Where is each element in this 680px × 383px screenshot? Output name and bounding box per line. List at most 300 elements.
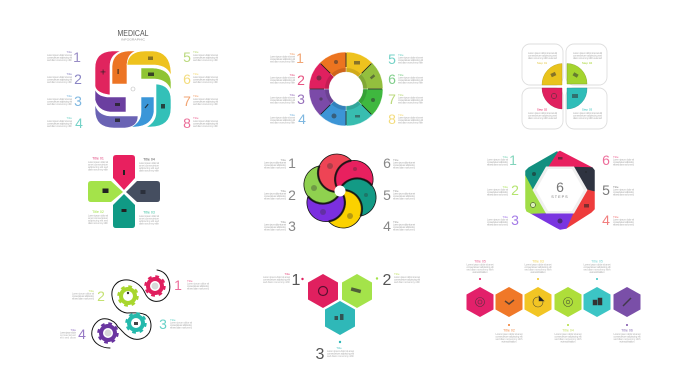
left text blocks: Title — [66, 94, 72, 98]
left numbers and text: Lorem ipsum dolor sit amet — [270, 76, 295, 80]
cross titles and text: Title 01 — [92, 156, 104, 160]
left numbers and text: consectetuer adipiscing elit — [270, 98, 295, 102]
gear numbers and text: Lorem ipsum dolor — [60, 330, 76, 334]
cross titles and text: adipiscing elit sed — [139, 166, 160, 170]
right text blocks: Title — [193, 50, 199, 54]
step text: Step 01 — [537, 61, 548, 65]
gears — [98, 276, 164, 342]
bottom titles and text — [496, 328, 641, 344]
bottom titles and text: euismod tincidunt — [502, 340, 517, 344]
right text blocks: sed diam nonummy nibh — [193, 124, 219, 128]
right numbers and text: Title — [613, 185, 619, 189]
numbers and text: Title — [394, 272, 400, 276]
top titles and text: euismod tincidunt — [590, 270, 605, 274]
right numbers and text: elit sed diam nonummy — [393, 166, 416, 170]
right numbers and text: Title — [393, 158, 399, 162]
left numbers and text: Title — [502, 215, 508, 219]
left numbers and text: Lorem ipsum dolor sit amet — [270, 96, 295, 100]
right numbers and text: Title — [398, 53, 404, 57]
right numbers and text — [383, 155, 416, 234]
right numbers and text: Lorem ipsum dolor sit amet — [393, 192, 415, 196]
left text blocks: consectetuer adipiscing elit — [47, 122, 72, 126]
left numbers and text: sed diam nonummy nibh — [270, 100, 296, 104]
left numbers and text: consectetuer adipiscing — [264, 194, 287, 198]
left text blocks: consectetuer adipiscing elit — [47, 56, 72, 60]
step text: consectetuer adipiscing sed — [573, 54, 603, 58]
panel: four arrow cross — [88, 155, 160, 228]
cross titles and text: adipiscing elit sed — [88, 165, 109, 169]
swirl petals — [297, 153, 383, 229]
left numbers and text: consectetuer adipiscing — [264, 225, 287, 229]
left text blocks: sed diam nonummy nibh — [47, 102, 73, 106]
bottom titles and text: sed diam nonummy nibh — [554, 337, 582, 341]
right numbers and text: Lorem ipsum dolor sit amet — [398, 56, 423, 60]
left numbers and text: consectetuer adipiscing — [487, 220, 509, 224]
panel: six petal swirl — [264, 153, 416, 234]
gear numbers and text: 1 — [174, 277, 182, 293]
inner white hexagon — [536, 169, 584, 211]
left numbers and text: elit sed diam nonummy — [487, 192, 509, 196]
gear numbers and text: Title — [187, 279, 193, 283]
right numbers and text: consectetuer adipiscing — [613, 220, 635, 224]
step text: consectetuer adipiscing sed — [528, 54, 558, 58]
panel: four rounded cards with petals — [522, 44, 607, 129]
numbers and text: sed diam nonummy nibh — [394, 280, 421, 284]
panel: six hexagon timeline — [466, 260, 641, 344]
right numbers and text: elit sed diam nonummy — [613, 162, 635, 166]
right numbers — [183, 49, 191, 131]
title — [118, 29, 149, 42]
right numbers and text — [388, 51, 424, 127]
left text blocks: Title — [66, 50, 72, 54]
left text blocks: consectetuer adipiscing elit — [47, 78, 72, 82]
left numbers and text: sed diam nonummy nibh — [270, 120, 296, 124]
petals — [542, 64, 587, 109]
top titles and text: Lorem ipsum dolor sit amet — [466, 262, 494, 266]
top titles and text: consectetuer adipiscing elit — [466, 265, 494, 269]
left numbers and text: elit sed diam nonummy — [264, 166, 287, 170]
left numbers: 2 — [74, 71, 82, 87]
left numbers and text: consectetuer adipiscing elit — [270, 118, 295, 122]
right numbers and text: 4 — [383, 218, 391, 234]
numbers and text — [263, 272, 421, 363]
step text — [528, 51, 603, 120]
cross titles and text: diam nonummy nibh — [88, 168, 109, 172]
hexagon center label — [551, 179, 569, 199]
left numbers and text — [487, 152, 519, 228]
numbers and text: Title — [336, 346, 342, 350]
left text blocks: sed diam nonummy nibh — [47, 58, 73, 62]
step text: Step 03 — [582, 108, 593, 112]
left numbers and text: 2 — [297, 72, 305, 88]
right numbers and text: 4 — [602, 212, 610, 228]
top titles and text: consectetuer adipiscing elit — [584, 265, 611, 269]
right numbers and text: Lorem ipsum dolor sit — [613, 188, 634, 192]
left text blocks: consectetuer adipiscing elit — [47, 100, 72, 104]
bottom titles and text: Title 06 — [621, 328, 633, 332]
right numbers: 5 — [183, 49, 191, 65]
right numbers and text: consectetuer adipiscing elit — [398, 78, 423, 82]
left numbers and text: 1 — [509, 152, 517, 168]
right numbers: 8 — [183, 115, 191, 131]
step text: Step 04 — [582, 61, 593, 65]
left numbers and text: Title — [502, 185, 508, 189]
right text blocks: consectetuer adipiscing elit — [193, 100, 218, 104]
numbers and text: Lorem ipsum dolor sit amet — [394, 275, 420, 279]
right numbers and text — [602, 152, 635, 228]
left numbers: 1 — [73, 49, 81, 65]
right numbers and text: Title — [613, 215, 619, 219]
left numbers and text: consectetuer adipiscing — [487, 160, 509, 164]
left text blocks: Lorem ipsum dolor sit amet — [47, 75, 72, 79]
right numbers and text: Lorem ipsum dolor sit amet — [393, 222, 415, 226]
right text blocks: Lorem ipsum dolor sit amet — [193, 75, 218, 79]
right numbers and text: sed diam nonummy nibh — [398, 120, 424, 124]
gear numbers and text: consectetuer — [60, 333, 76, 337]
cross titles and text: Lorem ipsum dolor sit — [139, 214, 159, 218]
gear numbers and text: 4 — [78, 326, 86, 342]
cross titles and text: adipiscing elit sed — [88, 218, 109, 222]
left numbers and text: consectetuer adipiscing elit — [270, 57, 295, 61]
title: MEDICAL — [118, 29, 149, 38]
hexagon icons — [318, 286, 361, 320]
top titles and text: euismod tincidunt — [472, 270, 488, 274]
top titles and text: Title 03 — [532, 260, 544, 264]
swirl center — [334, 186, 346, 196]
right text blocks: sed diam nonummy nibh — [193, 80, 219, 84]
bottom titles and text: Lorem ipsum dolor sit amet — [614, 332, 641, 336]
panel: medical square infographic — [47, 29, 219, 131]
step text: Step 02 — [537, 108, 548, 112]
left numbers: 4 — [75, 115, 83, 131]
gear numbers and text: 2 — [97, 288, 105, 304]
numbers and text: sed diam nonummy nibh — [327, 354, 355, 358]
left text blocks: sed diam nonummy nibh — [47, 80, 73, 84]
numbers and text: 2 — [383, 272, 392, 289]
right numbers and text: Title — [393, 189, 399, 193]
left numbers and text — [264, 155, 296, 234]
step text: Lorem ipsum dolor sit amet elit — [528, 51, 557, 55]
left numbers and text: elit sed diam nonummy — [487, 162, 509, 166]
bottom titles and text: Title 04 — [562, 328, 574, 332]
numbers and text: consectetuer adipiscing elit — [327, 352, 354, 356]
numbers and text: Lorem ipsum dolor sit amet — [263, 275, 290, 279]
left numbers and text: sed diam nonummy nibh — [270, 60, 296, 64]
right numbers and text: elit sed diam nonummy — [393, 196, 416, 200]
right text blocks: sed diam nonummy nibh — [193, 102, 219, 106]
right numbers and text: 7 — [388, 91, 396, 107]
step text: Lorem ipsum dolor sit amet elit — [528, 111, 557, 115]
left numbers and text: 2 — [511, 182, 519, 198]
right text blocks: Lorem ipsum dolor sit amet — [193, 53, 218, 57]
right numbers and text: 6 — [602, 152, 610, 168]
left text blocks: Lorem ipsum dolor sit amet — [47, 97, 72, 101]
step text: diam nonummy nibh euismod — [528, 116, 558, 120]
hexagon segments — [526, 152, 594, 229]
swirl icons — [311, 163, 368, 219]
left numbers and text: Title — [502, 155, 508, 159]
left numbers and text: Lorem ipsum dolor sit — [487, 158, 508, 162]
step text: diam nonummy nibh euismod — [573, 116, 603, 120]
cross titles and text: adipiscing elit sed — [139, 219, 160, 223]
inner shade ring — [327, 70, 365, 108]
step text: diam nonummy nibh euismod — [573, 56, 603, 60]
hexagon center label: STEPS — [551, 195, 569, 199]
hexagon center label: 6 — [556, 179, 564, 195]
numbers and text: consectetuer adipiscing elit — [263, 278, 290, 282]
right numbers and text: Title — [613, 155, 619, 159]
numbers and text: Lorem ipsum dolor sit amet — [327, 349, 354, 353]
gear numbers and text: Title — [70, 328, 76, 332]
top titles and text: sed diam nonummy nibh — [466, 268, 494, 272]
left numbers and text: Title — [289, 113, 295, 117]
right numbers and text: Lorem ipsum dolor sit amet — [398, 96, 423, 100]
right numbers and text: 5 — [383, 187, 391, 203]
gear numbers and text: elit sed diam nonummy — [187, 286, 210, 290]
left numbers and text: 3 — [297, 91, 305, 107]
bottom titles and text: Lorem ipsum dolor sit amet — [496, 332, 523, 336]
right numbers and text: elit sed diam nonummy — [613, 222, 635, 226]
right numbers and text: 5 — [602, 182, 610, 198]
right text blocks: Title — [193, 116, 199, 120]
bottom titles and text: consectetuer adipiscing elit — [614, 334, 641, 338]
right numbers and text: Title — [398, 113, 404, 117]
right text blocks: sed diam nonummy nibh — [193, 58, 219, 62]
right numbers and text: 5 — [388, 51, 396, 67]
left text blocks: sed diam nonummy nibh — [47, 124, 73, 128]
left numbers and text: Lorem ipsum dolor sit amet — [264, 222, 286, 226]
left text blocks: Title — [66, 116, 72, 120]
numbers and text: sed diam nonummy nibh — [263, 280, 291, 284]
left numbers and text: consectetuer adipiscing — [487, 190, 509, 194]
numbers and text: 3 — [316, 346, 325, 363]
panel: three hexagons — [263, 272, 421, 363]
left text blocks: Lorem ipsum dolor sit amet — [47, 53, 72, 57]
segment dividers — [310, 53, 382, 125]
cross titles and text: Lorem ipsum dolor sit — [139, 161, 159, 165]
gear numbers and text: 3 — [159, 316, 167, 332]
left text blocks: Title — [66, 72, 72, 76]
timeline hexagons — [466, 287, 640, 317]
numbers and text: consectetuer adipiscing elit — [394, 278, 420, 282]
left numbers and text: Title — [280, 158, 286, 162]
left numbers and text: 3 — [288, 218, 296, 234]
cross titles and text: Title 02 — [92, 210, 104, 214]
step text: diam nonummy nibh euismod — [528, 56, 558, 60]
top titles and text: Lorem ipsum dolor sit amet — [524, 262, 552, 266]
right numbers and text: elit sed diam nonummy — [393, 228, 416, 232]
left numbers and text: Title — [289, 52, 295, 56]
cross titles and text: Lorem ipsum dolor sit — [88, 214, 108, 218]
right numbers and text: Lorem ipsum dolor sit — [613, 218, 634, 222]
right numbers and text: elit sed diam nonummy — [613, 192, 635, 196]
cross titles and text: diam nonummy nibh — [88, 221, 109, 225]
top titles and text: Lorem ipsum dolor sit amet — [584, 262, 611, 266]
right numbers and text: sed diam nonummy nibh — [398, 60, 424, 64]
top titles and text: sed diam nonummy nibh — [584, 268, 611, 272]
right numbers: 6 — [183, 71, 191, 87]
title: INFOGRAPHIC — [121, 38, 145, 42]
right text blocks: consectetuer adipiscing elit — [193, 78, 218, 82]
left numbers: 3 — [74, 93, 82, 109]
left numbers and text: Lorem ipsum dolor sit — [487, 218, 508, 222]
right text blocks: consectetuer adipiscing elit — [193, 56, 218, 60]
inner soft shade — [532, 166, 588, 214]
hexagon icons — [530, 157, 589, 224]
bottom titles and text: Lorem ipsum dolor sit amet — [554, 332, 582, 336]
right numbers and text: consectetuer adipiscing — [613, 190, 635, 194]
top titles and text: Title 05 — [591, 260, 603, 264]
left numbers and text — [270, 50, 306, 127]
petal shadows — [308, 161, 372, 221]
right text blocks: Lorem ipsum dolor sit amet — [193, 119, 218, 123]
segment icons — [100, 56, 165, 122]
gear numbers and text — [60, 277, 210, 342]
right numbers and text: sed diam nonummy nibh — [398, 80, 424, 84]
gear numbers and text: consectetuer adipiscing — [170, 323, 193, 327]
step text: Lorem ipsum dolor sit amet elit — [573, 111, 602, 115]
cross titles and text: amet consectetuer — [88, 216, 108, 220]
left numbers and text: 3 — [511, 212, 519, 228]
cross titles and text: diam nonummy nibh — [139, 222, 160, 226]
bottom titles and text: euismod tincidunt — [560, 340, 576, 344]
left numbers and text: 1 — [288, 155, 296, 171]
left numbers and text: consectetuer adipiscing — [264, 163, 287, 167]
left numbers and text: 4 — [298, 111, 306, 127]
bottom titles and text: sed diam nonummy nibh — [614, 337, 641, 341]
left numbers and text: Lorem ipsum dolor sit amet — [270, 54, 295, 58]
gear numbers and text: Lorem ipsum dolor sit — [170, 320, 192, 324]
right numbers and text: 8 — [388, 111, 396, 127]
center icon — [131, 87, 135, 91]
gear numbers and text: consectetuer adipiscing — [72, 294, 95, 298]
right numbers and text: Lorem ipsum dolor sit amet — [398, 116, 423, 120]
hexagons — [308, 274, 372, 335]
right numbers and text: Lorem ipsum dolor sit — [613, 158, 634, 162]
top titles and text: Title 05 — [474, 260, 486, 264]
timeline icons — [476, 296, 631, 307]
cross icons — [102, 170, 146, 212]
right text blocks — [193, 50, 219, 128]
right numbers and text: consectetuer adipiscing — [393, 194, 416, 198]
right text blocks: Lorem ipsum dolor sit amet — [193, 97, 218, 101]
gear numbers and text: Title — [170, 318, 176, 322]
right numbers and text: Lorem ipsum dolor sit amet — [398, 76, 423, 80]
bottom titles and text: euismod tincidunt — [620, 340, 635, 344]
cross titles and text: amet consectetuer — [139, 164, 159, 168]
cross titles and text: amet consectetuer — [88, 162, 108, 166]
right numbers and text: consectetuer adipiscing — [393, 225, 416, 229]
step text: consectetuer adipiscing sed — [528, 114, 558, 118]
left numbers and text: Title — [289, 73, 295, 77]
left numbers and text: 2 — [288, 187, 296, 203]
right text blocks: Title — [193, 72, 199, 76]
right numbers and text: sed diam nonummy nibh — [398, 100, 424, 104]
left numbers and text: Lorem ipsum dolor sit amet — [264, 160, 286, 164]
right numbers and text: consectetuer adipiscing elit — [398, 58, 423, 62]
right numbers and text: consectetuer adipiscing elit — [398, 98, 423, 102]
cross titles and text: Title 03 — [143, 210, 155, 214]
right numbers and text: Title — [398, 93, 404, 97]
left text blocks: Lorem ipsum dolor sit amet — [47, 119, 72, 123]
left numbers and text: Title — [280, 220, 286, 224]
numbers and text: Title — [284, 272, 290, 276]
step text: consectetuer adipiscing sed — [573, 114, 603, 118]
left text blocks — [47, 50, 73, 128]
gear numbers and text: elit sed diam — [60, 336, 76, 340]
square segments — [95, 51, 171, 128]
ring icons — [316, 60, 375, 118]
right numbers and text: Title — [393, 220, 399, 224]
bottom titles and text: Title 02 — [503, 328, 515, 332]
top titles and text: consectetuer adipiscing elit — [524, 265, 552, 269]
right numbers: 7 — [183, 93, 191, 109]
right numbers and text: consectetuer adipiscing — [393, 163, 416, 167]
left numbers and text: Title — [280, 189, 286, 193]
right numbers and text: consectetuer adipiscing — [613, 160, 635, 164]
gear numbers and text: consectetuer adipiscing — [187, 284, 210, 288]
right text blocks: Title — [193, 94, 199, 98]
panel: six steps hexagon — [487, 152, 635, 229]
right numbers and text: Title — [398, 73, 404, 77]
bottom titles and text: consectetuer adipiscing elit — [554, 334, 582, 338]
connector dots — [479, 278, 628, 326]
top titles and text: sed diam nonummy nibh — [524, 268, 552, 272]
right numbers and text: consectetuer adipiscing elit — [398, 118, 423, 122]
panel: gears chain — [60, 270, 210, 348]
left numbers and text: 1 — [296, 50, 304, 66]
left numbers and text: sed diam nonummy nibh — [270, 80, 296, 84]
gear numbers and text: Title — [88, 289, 94, 293]
right numbers and text: 6 — [383, 155, 391, 171]
left numbers and text: consectetuer adipiscing elit — [270, 78, 295, 82]
left numbers and text: Lorem ipsum dolor sit amet — [270, 116, 295, 120]
cross titles and text — [88, 156, 160, 226]
step text: Lorem ipsum dolor sit amet elit — [573, 51, 602, 55]
connector dots — [301, 277, 378, 343]
cross titles and text: amet consectetuer — [139, 216, 159, 220]
gear numbers and text: elit sed diam nonummy — [170, 326, 193, 330]
right numbers and text: 6 — [388, 71, 396, 87]
cross titles and text: diam nonummy nibh — [139, 168, 160, 172]
left numbers and text: Title — [289, 93, 295, 97]
right text blocks: consectetuer adipiscing elit — [193, 122, 218, 126]
panel: circular eight-step ring — [270, 50, 424, 127]
ring segments — [309, 52, 383, 126]
numbers and text: 1 — [292, 272, 301, 289]
gear numbers and text: Lorem ipsum dolor sit — [72, 292, 94, 296]
rounded cards — [522, 44, 607, 129]
gear numbers and text: Lorem ipsum dolor sit — [187, 282, 209, 286]
top titles and text — [466, 260, 611, 274]
right numbers and text: Lorem ipsum dolor sit amet — [393, 160, 415, 164]
left numbers and text: Lorem ipsum dolor sit — [487, 188, 508, 192]
left numbers and text: Lorem ipsum dolor sit amet — [264, 192, 286, 196]
left numbers — [73, 49, 83, 131]
left numbers and text: elit sed diam nonummy — [264, 196, 287, 200]
petal icons — [550, 72, 579, 99]
cross arms — [88, 155, 160, 228]
black s-curve — [92, 270, 170, 348]
top titles and text: euismod tincidunt — [530, 270, 546, 274]
bottom titles and text: consectetuer adipiscing elit — [496, 334, 523, 338]
bottom titles and text: sed diam nonummy nibh — [496, 337, 523, 341]
left numbers and text: elit sed diam nonummy — [264, 228, 287, 232]
cross titles and text: Title 04 — [143, 158, 155, 162]
left numbers and text: elit sed diam nonummy — [487, 222, 509, 226]
cross titles and text: Lorem ipsum dolor sit — [88, 160, 108, 164]
gear numbers and text: elit sed diam nonummy — [72, 296, 95, 300]
